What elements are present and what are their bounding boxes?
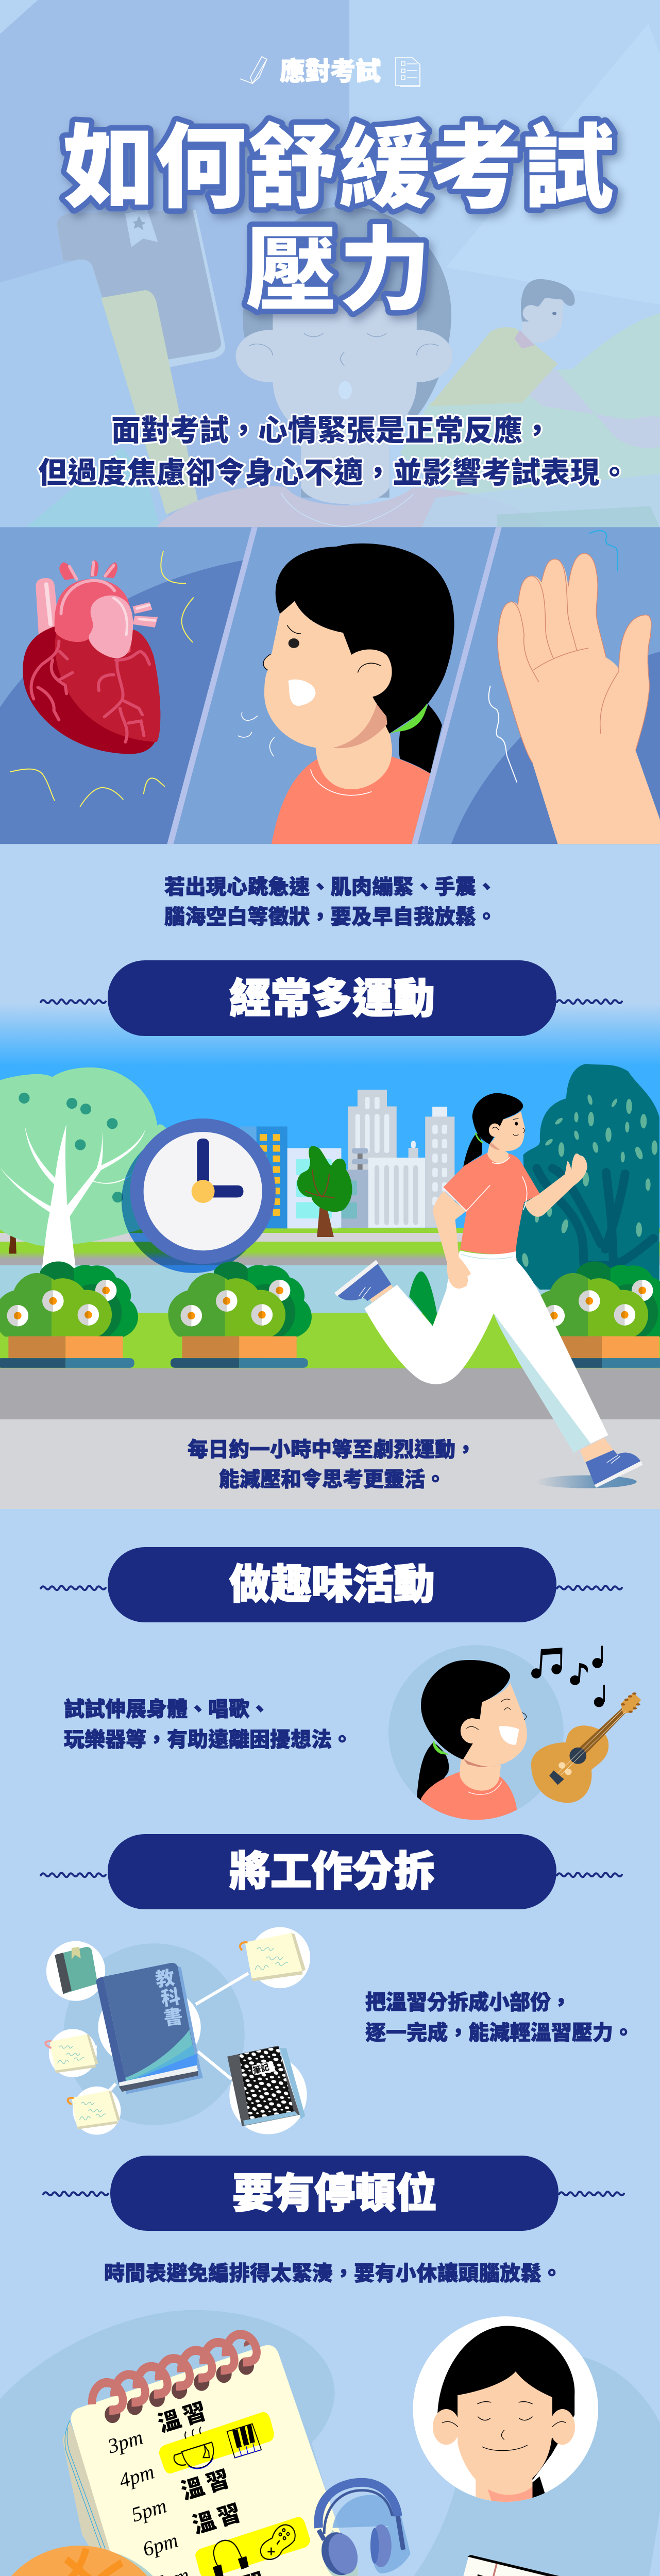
title: 如何舒緩考試 [63,94,614,227]
text: split work advice: 逐一完成，能減輕溫習壓力。 [365,2016,634,2046]
hero yellow card stripe [101,290,198,515]
subtitle: 應對考試 [280,51,381,88]
character: running woman [334,1093,643,1488]
heading pill: 經常多運動 [41,960,622,1036]
panel dividers [167,527,502,844]
hero central student [156,207,547,528]
text: exercise advice: 能減壓和令思考更靈活。 [219,1463,446,1493]
intro text [38,407,629,492]
text: symptoms advice: 若出現心跳急速、肌肉繃緊、手震、 [164,870,497,900]
flower planters [0,1261,660,1368]
textbook label [154,1962,184,2030]
icon: pencil check [240,57,267,83]
green book [55,1947,98,1994]
composition notebook [227,2046,305,2126]
text: schedule advice: 時間表避免編排得太緊湊，要有小休讓頭腦放鬆。 [104,2257,562,2286]
title: 壓力 [245,197,431,329]
heading pill: 做趣味活動: 做趣味活動 [229,1551,435,1611]
planner time labels: 5pm [129,2494,170,2527]
note pad left [49,2034,98,2073]
textbook label: 書 [162,2001,184,2030]
textbook label: 科 [159,1981,182,2011]
city buildings [214,1090,454,1228]
planner time labels: 3pm [105,2426,146,2458]
text: exercise advice [188,1433,476,1493]
hero blue card [0,259,173,528]
yellow pulse marks [10,551,194,807]
hero book [57,210,225,367]
planner time labels: 6pm [140,2529,181,2561]
panel: park scene [0,1003,660,1509]
blue building [240,1126,338,1228]
text: split work advice: 把溫習分拆成小部份， [365,1986,571,2015]
text: symptoms advice [164,870,497,930]
text: split work advice [365,1986,634,2046]
planner study labels: 溫習 [153,2392,213,2438]
icon: document checklist [396,58,420,87]
background blobs [0,2310,660,2576]
icon: tea cup [174,2427,213,2468]
icon: piano [227,2424,261,2458]
hero background man [429,279,660,448]
text: hobbies advice: 試試伸展身體、唱歌、 [64,1692,270,1722]
textbook label: 教 [154,1962,176,1992]
illustration: tea cup [438,2555,602,2576]
planner study labels: 溫習 [176,2459,236,2506]
text: exercise advice: 每日約一小時中等至劇烈運動， [188,1433,476,1463]
heading pill: 做趣味活動 [41,1547,622,1622]
right teal tree [516,1064,659,1290]
illustration: singing girl with guitar [388,1645,641,1823]
heading pill: 要有停頓位 [43,2156,624,2231]
intro text: 面對考試，心情緊張是正常反應， [111,407,552,449]
guitar [531,1692,641,1803]
text: hobbies advice: 玩樂器等，有助遠離困擾想法。 [64,1723,352,1753]
white tremble marks [489,686,517,783]
icon: game controller [261,2525,295,2560]
heading pill: 將工作分拆: 將工作分拆 [229,1838,435,1898]
planner study labels: 溫習 [188,2493,248,2540]
note pad top right [245,1933,306,1981]
icon: heart [23,560,160,754]
text: hobbies advice [64,1692,352,1753]
clock [122,1118,276,1273]
big mint tree [0,1067,168,1268]
panel: hero illustration background [0,0,660,528]
character: worried girl [238,544,454,844]
hero teal shapes [25,447,160,528]
icon: large headphones [316,2482,411,2576]
heading pill: 經常多運動: 經常多運動 [229,965,435,1025]
planner time labels: 4pm [116,2460,157,2493]
intro text: 但過度焦慮卻令身心不適，並影響考試表現。 [38,449,629,492]
hero papers [421,474,660,528]
music notes [531,1646,605,1707]
notebook label: 筆記 [251,2060,270,2076]
note pad bottom left [72,2091,120,2129]
blue tremble mark [589,531,618,571]
planner time labels [105,2426,216,2576]
text: symptoms advice: 腦海空白等徵狀，要及早自我放鬆。 [164,900,497,930]
textbook [96,1963,203,2094]
illustration: split textbook into notes [45,1927,310,2135]
hero green hills [400,313,660,528]
small green shrub [409,1272,437,1326]
small tree [297,1146,352,1237]
planner study labels [153,2392,284,2576]
icon: small headphones [213,2540,248,2576]
illustration: basketball [11,2546,153,2576]
panel: symptoms illustration [0,527,660,844]
heading pill: 將工作分拆 [41,1834,622,1909]
illustration: relaxed face [413,2316,598,2504]
character: trembling hand [498,553,660,844]
heading pill: 要有停頓位: 要有停頓位 [232,2160,437,2220]
planner notebook [62,2334,365,2576]
title [63,94,614,329]
